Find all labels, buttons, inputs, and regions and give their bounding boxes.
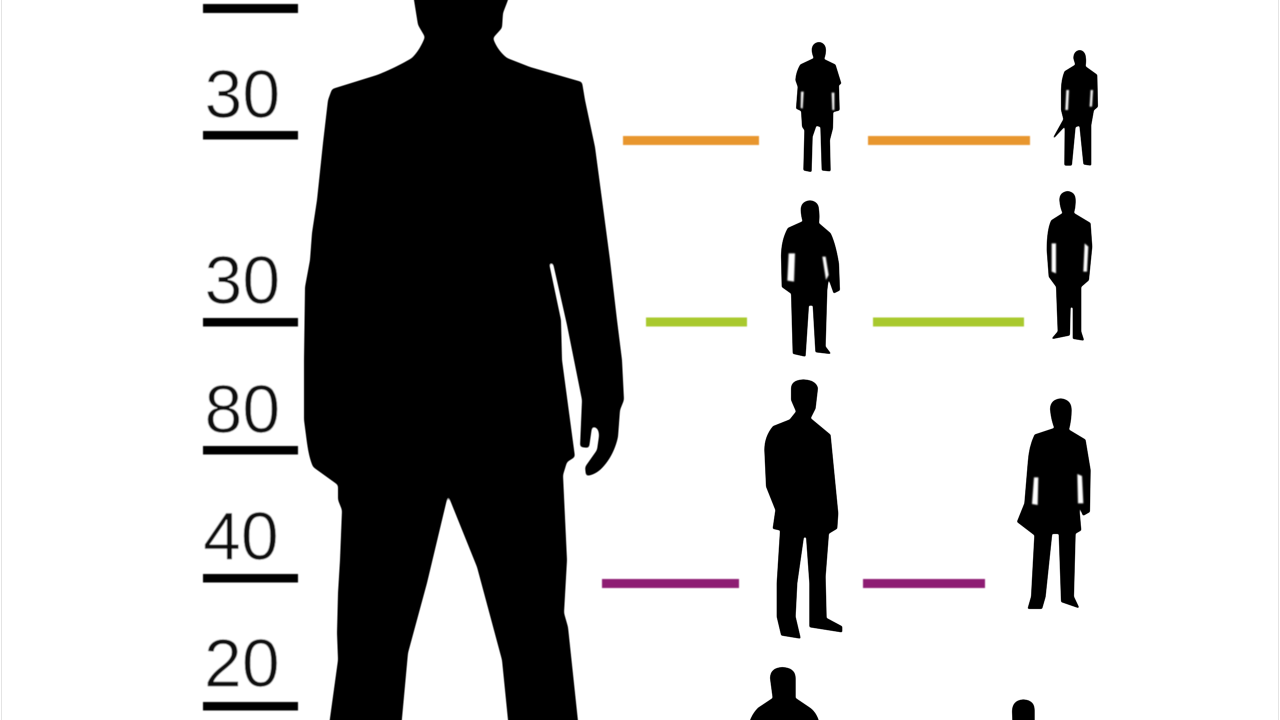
silhouette: green row right	[1047, 192, 1092, 340]
scale tick: 20	[203, 702, 298, 710]
scale label 20: 20	[204, 626, 280, 702]
silhouette: purple row right	[1018, 399, 1090, 608]
silhouette: green row left	[782, 201, 839, 356]
scale label second 30: 30	[204, 242, 280, 318]
silhouette: bottom row right	[1013, 700, 1034, 720]
scale tick: 80	[203, 446, 298, 454]
small silhouettes, upper rows	[782, 43, 1097, 356]
scale tick: second 30	[203, 318, 298, 326]
silhouette: orange row left	[796, 43, 841, 171]
scale tick: top	[203, 4, 298, 13]
small silhouettes, lower rows	[748, 380, 1090, 720]
scale tick: 30	[203, 131, 298, 140]
scale label 30: 30	[204, 56, 280, 132]
connector bars: green row	[646, 318, 1024, 326]
height scale ruler	[203, 4, 298, 710]
silhouette: purple row left	[765, 380, 842, 638]
scale label 80: 80	[204, 372, 280, 448]
connector bars: purple row	[602, 579, 985, 588]
silhouette: bottom row left	[748, 668, 820, 720]
scale label 40: 40	[203, 498, 279, 574]
silhouette: orange row right	[1054, 51, 1097, 165]
large silhouette: man in suit	[304, 0, 624, 720]
connector bars: orange row	[623, 136, 1030, 145]
scale tick: 40	[203, 574, 298, 582]
